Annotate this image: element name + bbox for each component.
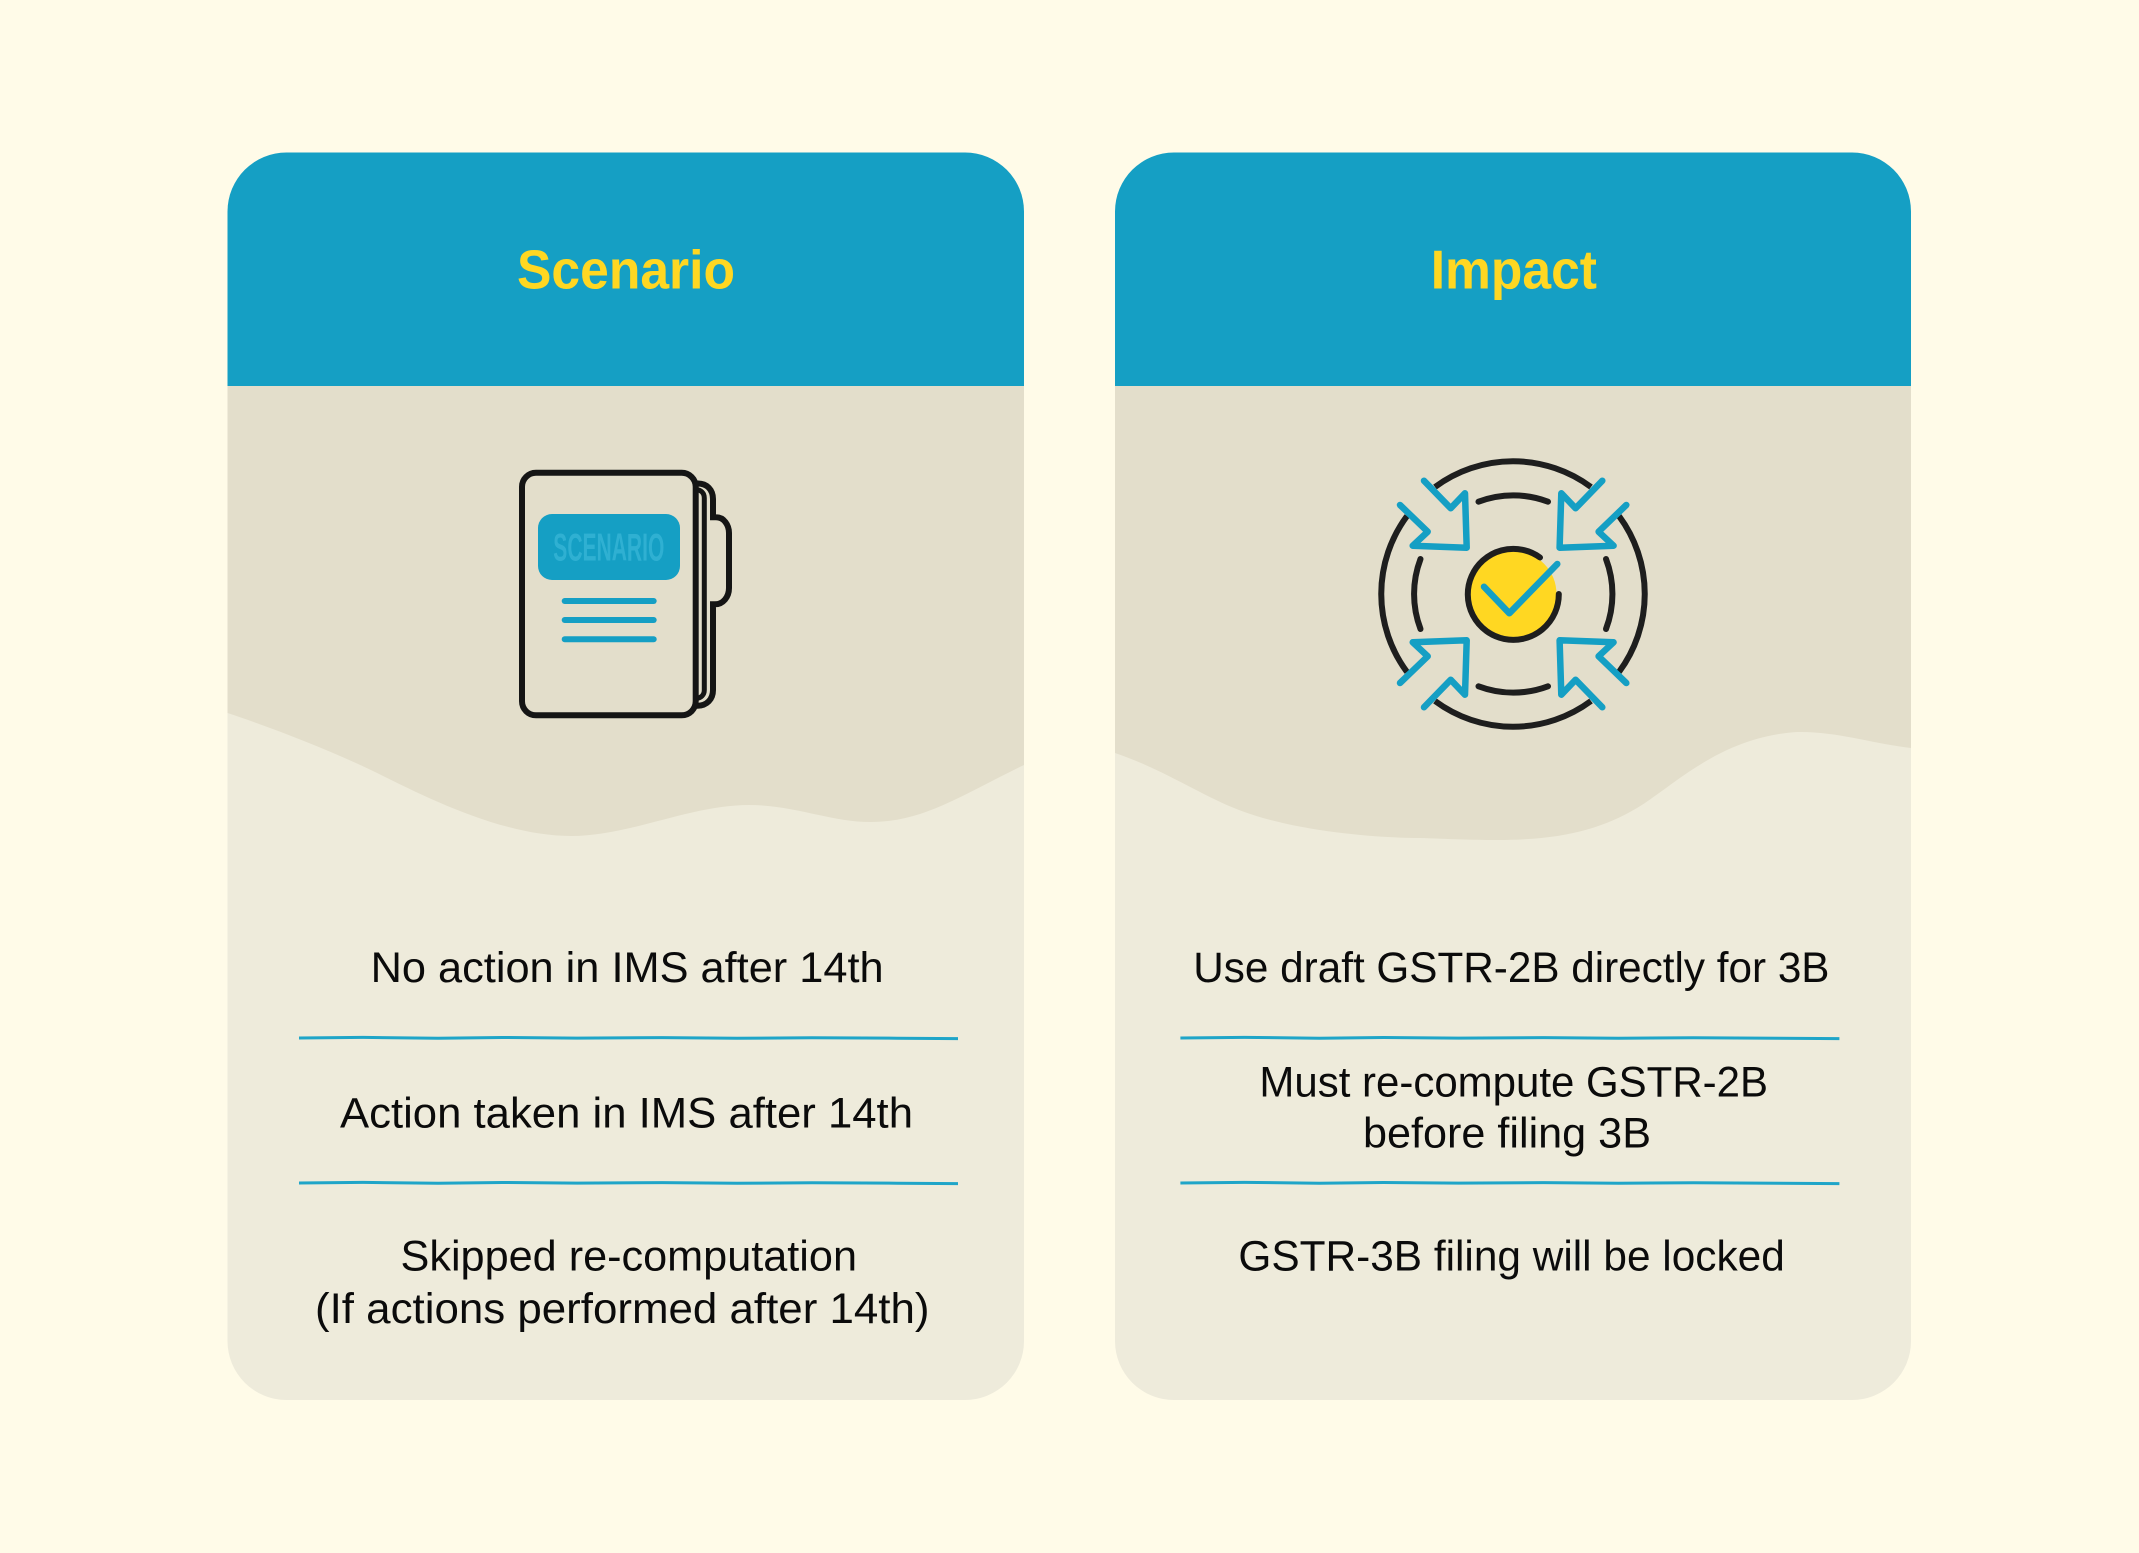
arrow bottom left <box>1400 640 1467 707</box>
text: row 3: (If actions performed after 14th) <box>315 1285 929 1333</box>
folder label text: SCENARIO <box>553 527 664 570</box>
card body <box>228 386 1024 1400</box>
panel: impact <box>1115 152 1911 1400</box>
text: row 2: Action taken in IMS after 14th <box>340 1090 913 1138</box>
wavy tan band <box>228 386 1024 836</box>
text: row 3: GSTR-3B filing will be locked <box>1238 1233 1785 1281</box>
folder text lines <box>562 598 657 642</box>
wavy tan band <box>1115 386 1911 840</box>
heading: Impact: Impact <box>1431 238 1597 300</box>
card body <box>1115 386 1911 1400</box>
text: row 2: Must re-compute GSTR-2B <box>1259 1059 1768 1107</box>
yellow centre disc <box>1470 551 1556 637</box>
inner ring arcs <box>1414 495 1612 693</box>
text: row 2 <box>1259 1059 1768 1158</box>
arrow top right <box>1560 481 1626 548</box>
text: row 2: before filing 3B <box>1363 1110 1651 1158</box>
text: row 1: No action in IMS after 14th <box>371 944 884 992</box>
folder label <box>538 514 680 580</box>
outer ring arcs <box>1381 461 1645 727</box>
text: row 3: Skipped re-computation <box>400 1233 857 1281</box>
heading: Scenario: Scenario <box>517 238 735 300</box>
centre ring <box>1468 549 1559 640</box>
text: row 3 <box>315 1233 929 1333</box>
header band <box>1115 152 1911 386</box>
arrow bottom right <box>1560 640 1626 707</box>
icon: folder <box>522 473 729 715</box>
text: row 1: Use draft GSTR-2B directly for 3B <box>1193 944 1830 992</box>
check mark <box>1484 564 1557 613</box>
header band <box>228 152 1024 386</box>
panel: scenario <box>228 152 1024 1400</box>
icon: converging arrows with check <box>1381 461 1645 727</box>
arrow top left <box>1400 481 1467 548</box>
